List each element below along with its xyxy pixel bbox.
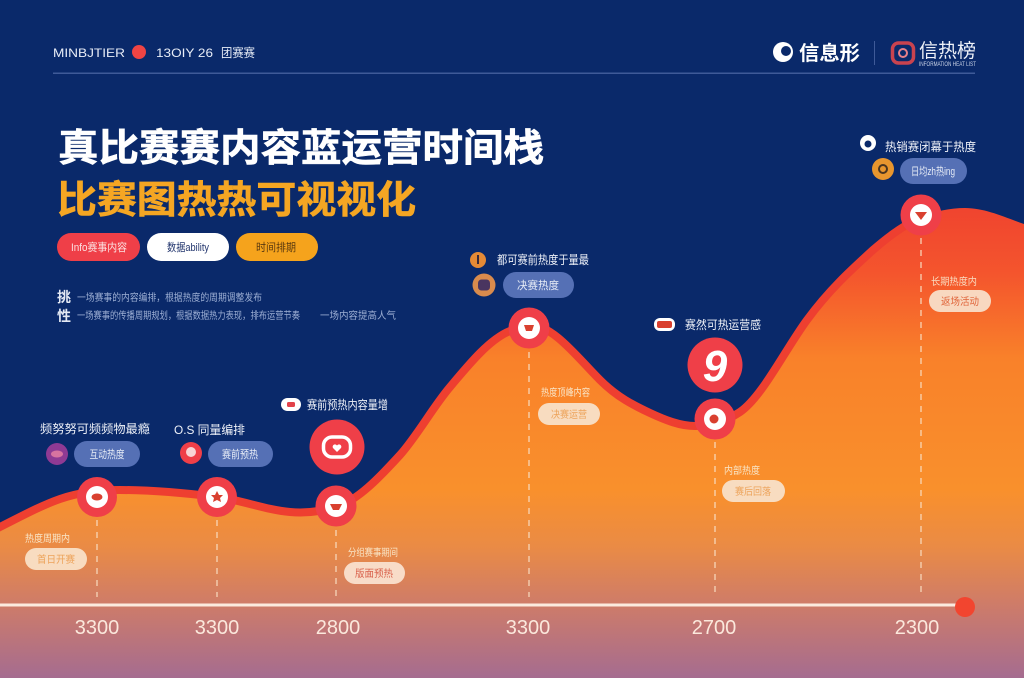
description text — [57, 289, 396, 324]
header divider — [53, 72, 975, 74]
event 5 callout — [654, 317, 761, 392]
event 1 callout: 互动热度 — [90, 447, 124, 461]
event 6 callout: 热销赛闭幕于热度 — [885, 139, 976, 154]
event 4 callout: 决赛热度 — [517, 278, 559, 292]
lower label 3 — [538, 386, 600, 425]
logo divider — [874, 41, 875, 65]
logo: 信热榜 — [892, 40, 976, 68]
header left text: 团赛赛 — [221, 45, 255, 60]
event 4 callout: 都可赛前热度于量最 — [497, 252, 589, 267]
node 6 — [900, 194, 942, 236]
event 5 callout: 赛然可热运营感 — [685, 317, 761, 332]
event 2 callout: O.S 同量编排 — [174, 422, 245, 437]
lower label 3: 热度顶峰内容 — [541, 386, 590, 399]
event 6 callout — [860, 135, 976, 184]
logo: 信热榜: 信热榜 — [919, 40, 976, 62]
tag pills: 时间排期 — [256, 240, 296, 254]
lower label 2 — [344, 546, 405, 584]
timeline axis — [0, 597, 975, 617]
tag pills — [57, 233, 318, 261]
lower label 4: 赛后回落 — [735, 485, 771, 498]
timeline values — [75, 617, 939, 639]
lower label 2: 版面预热 — [355, 567, 393, 580]
description text: 一场赛事的传播周期规划，根据数据热力表现，排布运营节奏 — [77, 309, 300, 322]
timeline values: 3300 — [195, 617, 239, 639]
description text: 一场赛事的内容编排，根据热度的周期调整发布 — [77, 291, 262, 304]
logo: 信息形: 信息形 — [799, 41, 860, 65]
event 1 callout: 频努努可频频物最瘾 — [40, 421, 150, 436]
node 5 — [694, 398, 736, 440]
lower label 5: 返场活动 — [941, 295, 979, 308]
logo: 信热榜: INFORMATION HEAT LIST — [919, 62, 976, 68]
lower label 2: 分组赛事期间 — [348, 546, 398, 559]
node 4 — [508, 308, 550, 348]
header left text: 13OIY 26 — [156, 46, 213, 60]
node 2 — [197, 477, 237, 517]
node 1 — [77, 477, 117, 517]
lower label 1 — [25, 532, 87, 570]
header left text — [53, 45, 255, 60]
lower label 1: 首日开赛 — [37, 553, 75, 566]
title — [57, 128, 544, 222]
event 2 callout: 赛前预热 — [222, 447, 258, 461]
lower label 4: 内部热度 — [724, 464, 760, 477]
description text: 挑 — [57, 289, 71, 305]
title: 比赛图热热可视视化 — [57, 180, 416, 222]
tag pills: 数据ability — [167, 240, 209, 254]
node 3 — [316, 486, 356, 526]
event 3 callout — [281, 397, 388, 474]
logo: 信息形 — [773, 41, 860, 65]
timeline values: 2300 — [895, 617, 939, 639]
lower label 3: 决赛运营 — [551, 408, 587, 421]
tag pills: Info赛事内容 — [71, 240, 127, 254]
lower label 1: 热度周期内 — [25, 532, 70, 545]
timeline values: 3300 — [506, 617, 550, 639]
heat area chart — [0, 208, 1024, 678]
event 5 callout: 9 — [703, 342, 728, 391]
description text: 性 — [57, 308, 71, 324]
event 4 callout — [470, 252, 589, 298]
event 3 callout: 赛前预热内容量增 — [307, 397, 388, 412]
title: 真比赛赛内容蓝运营时间栈 — [58, 128, 544, 170]
lower label 5 — [929, 275, 991, 312]
event 1 callout — [40, 421, 150, 467]
timeline values: 2700 — [692, 617, 736, 639]
description text: 一场内容提高人气 — [320, 309, 396, 322]
timeline values: 3300 — [75, 617, 119, 639]
dashed time guides — [97, 238, 921, 597]
event 2 callout — [174, 422, 273, 467]
lower label 5: 长期热度内 — [931, 275, 977, 288]
timeline values: 2800 — [316, 617, 360, 639]
header left text: MINBJTIER — [53, 46, 125, 60]
event 6 callout: 日均zh热ing — [911, 165, 955, 178]
lower label 4 — [722, 464, 785, 502]
